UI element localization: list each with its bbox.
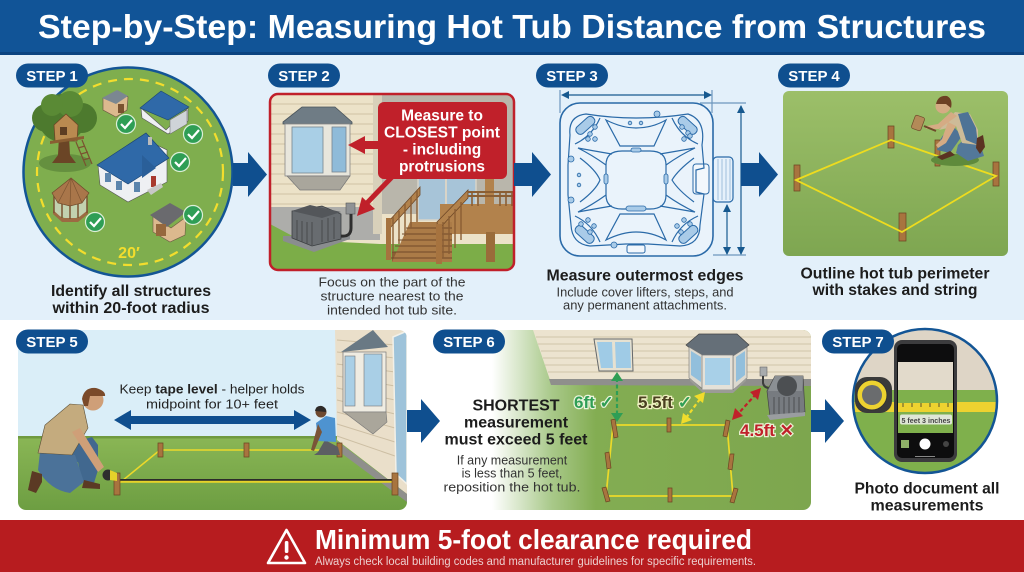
icon: main house bbox=[97, 133, 169, 202]
red 4.5ft measurement bbox=[732, 388, 794, 440]
step 2 caption: structure nearest to the bbox=[320, 290, 464, 304]
title banner bbox=[0, 0, 1024, 55]
icon: warning triangle bbox=[268, 530, 305, 563]
step 5 badge: STEP 5 bbox=[26, 334, 78, 351]
footer heading: Minimum 5-foot clearance required bbox=[315, 524, 752, 555]
reposition note: reposition the hot tub. bbox=[444, 480, 580, 494]
step 1 caption: Identify all structures bbox=[51, 283, 211, 300]
shortest measurement heading: measurement bbox=[464, 414, 569, 432]
phone with photo: 5 feet 3 inches bbox=[902, 416, 950, 425]
double headed arrow bbox=[114, 410, 311, 430]
step 1 badge: STEP 1 bbox=[26, 68, 78, 85]
step 7 caption: Photo document all bbox=[854, 480, 1000, 498]
icon: tape measure bbox=[855, 377, 892, 413]
yellow 5.5ft measurement bbox=[638, 392, 705, 424]
callout: measure to closest point: protrusions bbox=[399, 158, 485, 176]
step 4 caption: Outline hot tub perimeter bbox=[800, 266, 990, 282]
step 7 badge: STEP 7 bbox=[832, 334, 884, 351]
tape level instruction: Keep tape level - helper holds bbox=[120, 382, 305, 396]
reposition note: is less than 5 feet, bbox=[462, 466, 562, 480]
stakes and strings bbox=[114, 443, 398, 495]
step 3 caption bbox=[546, 268, 744, 312]
arrow: step 6 to step 7 bbox=[811, 399, 844, 443]
step 1 caption: within 20-foot radius bbox=[51, 300, 210, 317]
panel: step 2 bbox=[268, 64, 514, 318]
step 3 badge: STEP 3 bbox=[546, 68, 598, 85]
shortest measurement heading bbox=[444, 398, 588, 448]
panel: step 7 bbox=[822, 328, 1000, 514]
step 2 badge bbox=[268, 64, 340, 88]
red callout arrows bbox=[348, 136, 392, 216]
person with tape measure bbox=[28, 388, 117, 493]
icon: small shed bbox=[102, 90, 128, 117]
step 4 caption: with stakes and string bbox=[812, 282, 978, 299]
panel: step 4 bbox=[778, 64, 1008, 299]
arrow: step 1 to step 2 bbox=[233, 152, 267, 197]
red 4.5ft measurement: 4.5ft ✕ bbox=[740, 421, 794, 440]
worker with mallet bbox=[911, 96, 985, 166]
circle border bbox=[853, 329, 997, 473]
step 2 caption: intended hot tub site. bbox=[327, 304, 457, 318]
small window bbox=[594, 339, 633, 371]
hot tub diagram bbox=[560, 103, 733, 256]
step 2 caption: Focus on the part of the bbox=[318, 276, 466, 290]
scene background bbox=[18, 330, 407, 510]
air conditioner bbox=[283, 203, 355, 252]
warning footer banner bbox=[0, 520, 1024, 572]
panel: step 5 bbox=[16, 330, 407, 510]
step 3 caption: Include cover lifters, steps, and bbox=[556, 286, 734, 300]
callout: measure to closest point: - including bbox=[403, 142, 481, 158]
icon: tree house bbox=[32, 91, 97, 172]
grass field bbox=[783, 91, 1008, 256]
title banner: Step-by-Step: Measuring Hot Tub Distance from Structures bbox=[38, 8, 986, 45]
green 6ft measurement bbox=[574, 372, 623, 422]
callout: measure to closest point bbox=[378, 102, 507, 179]
step 7 caption: measurements bbox=[870, 498, 984, 514]
tape level instruction line two: midpoint for 10+ feet bbox=[146, 396, 278, 412]
air conditioner bbox=[760, 367, 805, 420]
step 5 badge bbox=[16, 330, 88, 354]
step 7 caption bbox=[854, 480, 1000, 514]
bay window bbox=[686, 334, 749, 393]
step 4 badge bbox=[778, 64, 850, 88]
step 1 caption bbox=[51, 283, 211, 317]
step 1 badge bbox=[16, 64, 88, 88]
callout: measure to closest point: Measure to bbox=[401, 108, 483, 124]
house scene bbox=[270, 94, 514, 270]
icon: gazebo bbox=[52, 178, 89, 222]
step 4 caption bbox=[800, 266, 990, 299]
arrow: step 2 to step 3 bbox=[514, 152, 551, 197]
step 3 badge bbox=[536, 64, 608, 88]
arrow: step 3 to step 4 bbox=[741, 152, 778, 197]
step 7 badge bbox=[822, 330, 894, 354]
wooden deck and stairs bbox=[386, 178, 514, 264]
green 6ft measurement: 6ft ✓ bbox=[574, 393, 614, 412]
dimension arrows bbox=[560, 90, 746, 255]
step 2 image border bbox=[270, 94, 514, 270]
yellow 5.5ft measurement: 5.5ft ✓ bbox=[638, 393, 692, 412]
shortest measurement heading: must exceed 5 feet bbox=[444, 432, 588, 448]
step 3 caption: any permanent attachments. bbox=[563, 298, 727, 312]
circular photo scene bbox=[852, 328, 998, 474]
step 2 caption bbox=[318, 276, 466, 318]
step 6 badge: STEP 6 bbox=[443, 334, 495, 351]
panel: step 1 bbox=[16, 64, 232, 317]
step 4 badge: STEP 4 bbox=[788, 68, 840, 85]
circle map of structures: 20′ bbox=[118, 245, 140, 262]
step 2 badge: STEP 2 bbox=[278, 68, 330, 85]
bay window bbox=[283, 107, 352, 190]
reposition note: If any measurement bbox=[457, 454, 568, 468]
icon: garage bbox=[140, 91, 189, 134]
step 3 caption: Measure outermost edges bbox=[546, 268, 744, 284]
stake and string perimeter bbox=[794, 126, 999, 241]
panel: step 3 bbox=[536, 64, 746, 312]
helper holding tape bbox=[311, 406, 340, 455]
icons: green check badges bbox=[86, 114, 202, 232]
icon: shed two bbox=[150, 203, 186, 242]
arrow: step 5 to step 6 bbox=[407, 399, 440, 443]
panel: step 6 bbox=[433, 330, 811, 510]
phone with photo bbox=[894, 340, 957, 462]
footer note: Always check local building codes and manufacturer guidelines for specific requirements. bbox=[315, 556, 756, 568]
circle map of structures bbox=[24, 68, 232, 276]
shortest measurement heading: SHORTEST bbox=[472, 398, 560, 414]
lawn and house wall bbox=[496, 330, 811, 510]
callout: measure to closest point: CLOSEST point bbox=[384, 124, 500, 142]
hot tub perimeter stakes bbox=[602, 418, 738, 503]
reposition note bbox=[444, 454, 580, 494]
step 6 badge bbox=[433, 330, 505, 354]
